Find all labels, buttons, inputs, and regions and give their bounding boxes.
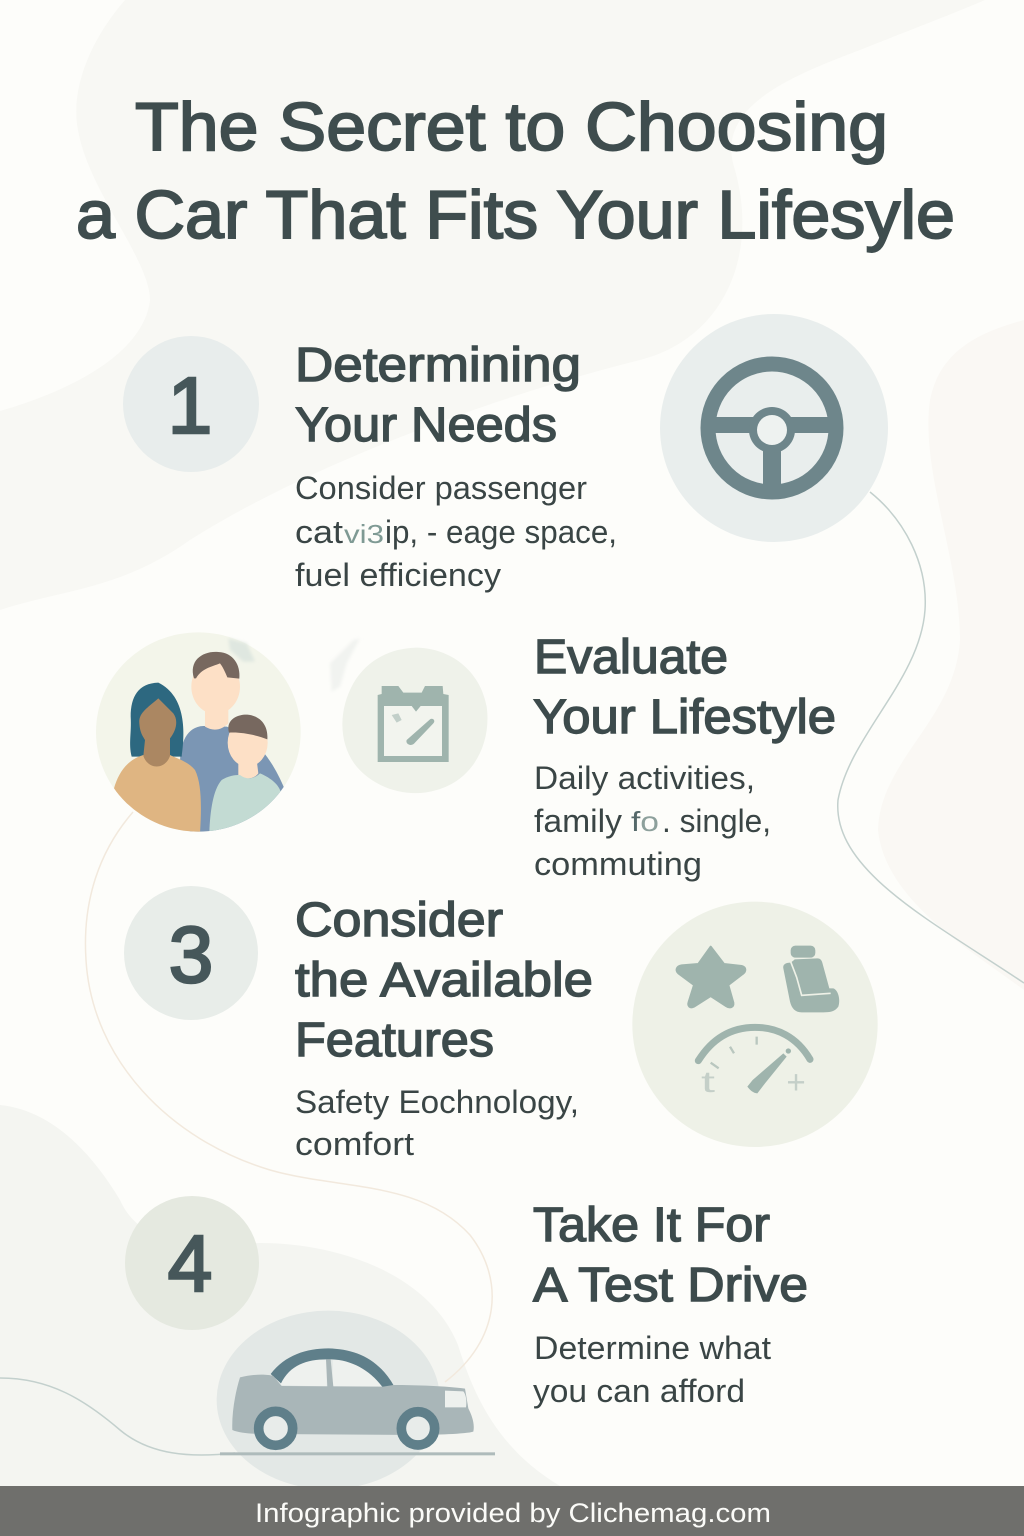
step 4 number badge: 4 [168, 1219, 212, 1308]
step 2 description: Daily activities, [534, 760, 755, 796]
footer bar [0, 1486, 1024, 1536]
connector path: family to car [85, 812, 492, 1382]
step 1 number badge [123, 336, 259, 472]
mother [114, 683, 201, 833]
child [209, 715, 281, 833]
step 4 text block [533, 1199, 808, 1409]
step 2 description: . single, [662, 803, 771, 839]
step 1 description: cat [295, 514, 343, 550]
step 3 description: comfort [295, 1126, 414, 1162]
star [677, 947, 745, 1007]
step 1 heading [295, 339, 581, 452]
step 4 description [533, 1330, 771, 1409]
rear wheel [259, 1411, 293, 1445]
step 2 heading: Evaluate [534, 631, 728, 684]
gauge: t [701, 1066, 715, 1099]
icon: car [217, 1311, 495, 1489]
windows [280, 1359, 383, 1387]
step 1 heading: Determining [295, 339, 581, 392]
step 4 heading: A Test Drive [533, 1259, 808, 1312]
step 2 description: fo [631, 806, 659, 837]
step 1 description: Consider passenger [295, 470, 587, 506]
step 2 description: family [534, 803, 622, 839]
headlight [445, 1391, 466, 1407]
step 3 heading [295, 894, 593, 1067]
body [232, 1375, 474, 1435]
step 1 text block [295, 339, 617, 593]
gauge [698, 1027, 810, 1101]
step 3 heading: the Available [295, 954, 593, 1007]
title: a Car That Fits Your Lifesyle [76, 177, 955, 253]
step 1 description: vi3 [344, 519, 384, 549]
icon: steering wheel [660, 314, 888, 542]
step 1 description: ip, - eage space, [385, 514, 617, 550]
front wheel [401, 1412, 435, 1445]
pillar [326, 1359, 333, 1387]
step 2 text block [533, 631, 836, 882]
step 2 description [534, 760, 771, 882]
step 3 heading: Consider [295, 894, 503, 947]
step 2 description: commuting [534, 846, 702, 882]
footer bar: Infographic provided by Clichemag.com [255, 1498, 771, 1528]
step 1 heading: Your Needs [295, 399, 557, 452]
step 3 description: Safety Eochnology, [295, 1084, 579, 1120]
connector path: steering wheel to right edge [838, 492, 1024, 983]
step 2 heading: Your Lifestyle [533, 691, 836, 744]
father [180, 652, 285, 833]
icon: features (star, seat, gauge) [632, 902, 878, 1147]
step 4 description: Determine what [534, 1330, 771, 1366]
connector path: left edge to car [0, 1378, 235, 1455]
roof [271, 1348, 394, 1387]
seat [783, 946, 839, 1012]
step 4 heading [533, 1199, 808, 1312]
step 1 number badge: 1 [168, 361, 212, 450]
step 3 number badge: 3 [169, 910, 213, 999]
step 3 heading: Features [295, 1014, 494, 1067]
title: The Secret to Choosing [135, 89, 888, 165]
gauge: + [786, 1064, 806, 1101]
step 4 number badge [125, 1196, 259, 1330]
icon: family illustration [96, 632, 301, 833]
step 3 number badge [124, 886, 258, 1020]
step 3 description [295, 1084, 579, 1162]
step 1 description: fuel efficiency [295, 557, 501, 593]
title [76, 89, 955, 253]
icon: calendar [330, 638, 487, 793]
step 4 heading: Take It For [533, 1199, 770, 1252]
step 3 text block [295, 894, 593, 1162]
step 2 heading [533, 631, 836, 744]
ground line [220, 1452, 495, 1455]
step 4 description: you can afford [533, 1373, 745, 1409]
step 1 description [295, 470, 617, 593]
